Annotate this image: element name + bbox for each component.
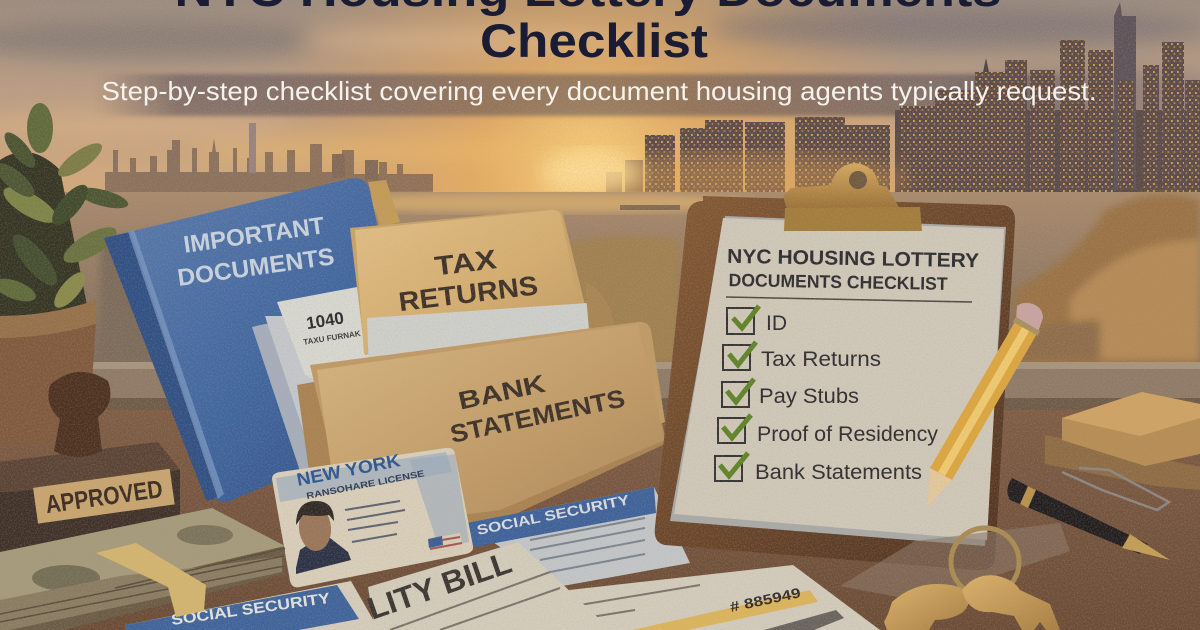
blue binder: important documents (104, 178, 420, 502)
sun glow (542, 150, 642, 194)
subtitle: Step-by-step checklist covering every document housing agents typically request. (102, 76, 1096, 106)
checklist items: Bank Statements (755, 461, 922, 484)
bank statements folder: STATEMENTS (448, 384, 628, 449)
subtitle backing band (95, 74, 1105, 116)
pen (1007, 478, 1170, 560)
clipboard: DOCUMENTS CHECKLIST (728, 270, 948, 294)
loose tax papers (252, 287, 397, 477)
paperclips (1062, 468, 1169, 510)
id card: new york license (272, 448, 473, 587)
checklist items (715, 306, 938, 484)
binder label: DOCUMENTS (176, 243, 336, 292)
utility bill (363, 542, 611, 630)
checklist items: ID (766, 312, 787, 335)
id photo (296, 501, 351, 574)
checklist items: Tax Returns (761, 348, 881, 371)
pencil (928, 303, 1043, 506)
bank statements folder: BANK (456, 370, 548, 415)
distant trees (100, 194, 1200, 370)
plant in pot (0, 103, 130, 442)
water (0, 192, 1200, 367)
binder label (176, 212, 336, 292)
approved stamp (0, 372, 180, 552)
form 1040: TAXU FURNAK (303, 329, 362, 347)
clip (783, 163, 905, 217)
social security card: front (125, 581, 379, 630)
stamp label: APPROVED (44, 475, 164, 519)
pot (0, 300, 96, 442)
side of folder (585, 282, 615, 342)
document on table right (840, 523, 1070, 601)
window sill (0, 362, 1200, 412)
checklist title: NYC HOUSING LOTTERY (727, 246, 980, 272)
plant leaves (0, 103, 130, 320)
form 1040 (299, 306, 362, 347)
checklist items: Proof of Residency (757, 423, 938, 446)
form 1040: 1040 (305, 308, 345, 333)
clipboard (655, 163, 1015, 570)
social security document: rear (466, 487, 690, 587)
tax returns folder: TAX (433, 244, 498, 282)
id card: new york license: RANSOHARE LICENSE (305, 468, 425, 501)
social security document: rear: SOCIAL SECURITY (475, 491, 631, 538)
checklist items: Pay Stubs (759, 385, 859, 408)
checklist paper (670, 216, 1006, 546)
id card: new york license: NEW YORK (295, 450, 402, 490)
stack of cash (0, 508, 285, 630)
binder label: IMPORTANT (182, 212, 326, 259)
receipt with barcode: # 885949 (728, 584, 802, 615)
utility bill: LITY BILL (363, 545, 516, 627)
table (0, 410, 1200, 630)
tax returns folder (350, 209, 585, 355)
title: Checklist (480, 14, 708, 67)
title (174, 0, 1002, 67)
skyline: left (105, 123, 433, 194)
folder tab behind binder (368, 180, 400, 227)
bank statements folder (297, 322, 667, 548)
flag (428, 533, 463, 557)
keys (884, 528, 1060, 630)
tax returns folder: RETURNS (397, 270, 540, 317)
stacked notepads (1045, 392, 1200, 490)
skyline: right (570, 2, 1200, 206)
papers between folders (367, 302, 607, 376)
social security card: front: SOCIAL SECURITY (170, 590, 331, 629)
background: sunset sky (0, 0, 1200, 300)
receipt with barcode (569, 565, 880, 630)
